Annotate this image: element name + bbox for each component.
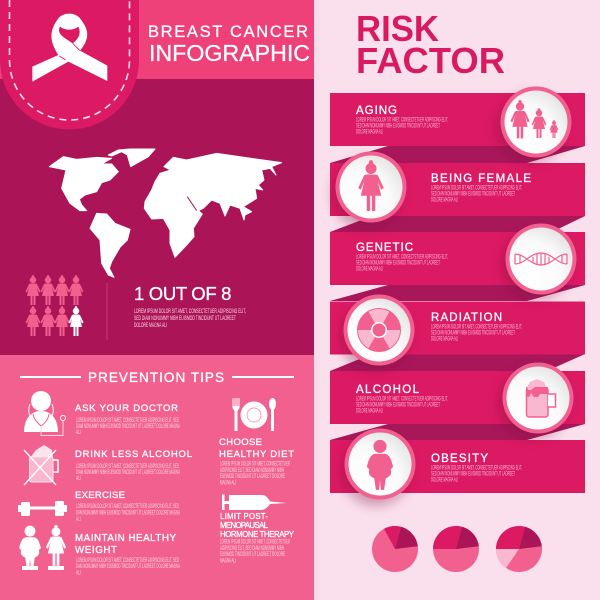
pie chart 2 (433, 526, 479, 572)
tip: maintain healthy weight: ALI (76, 570, 81, 576)
tip: drink less alcohol: ALI (76, 475, 81, 482)
tip: maintain healthy weight (75, 533, 180, 576)
tip: exercise (75, 490, 180, 523)
tip icon: doctor (24, 391, 66, 436)
tip: limit post-menopausal hormone therapy: HORMONE THERAPY (220, 530, 295, 539)
badge (0, 0, 139, 130)
risk: obesity: DOLORE MAGNA ALI (431, 476, 458, 484)
tip: limit post-menopausal hormone therapy: MENOPAUSAL (220, 521, 269, 530)
risk: being female (336, 152, 531, 222)
risk: genetic: DOLORE MAGNA ALI (356, 266, 383, 272)
tip: limit post-menopausal hormone therapy: MAGNA ALI (220, 558, 236, 564)
heading: prevention tips: PREVENTION TIPS (88, 370, 224, 385)
heading: risk factor: RISK (356, 8, 439, 49)
tip: drink less alcohol: DRINK LESS ALCOHOL (75, 449, 192, 460)
tip: limit post-menopausal hormone therapy: EUISMOD TINCIDUNT UT LAOREET DOLORE (220, 551, 285, 558)
text: LOREM IPSUM DOLOR SIT AMET, CONSECTETUER ADIPISCING ELIT, SED (76, 463, 179, 470)
risk: aging: AGING (356, 105, 397, 117)
tip: choose healthy diet (219, 437, 294, 486)
text: LOREM IPSUM DOLOR SIT AMET, CONSECTETUER ADIPISCING ELIT, SED (76, 503, 179, 510)
risk: obesity: OBESITY (431, 453, 488, 465)
risk: aging: LOREM IPSUM DOLOR SIT AMET, CONSECTETUER ADIPISCING ELIT, (356, 116, 448, 124)
tip: limit post-menopausal hormone therapy: LIMIT POST- (220, 512, 268, 521)
text: LOREM IPSUM DOLOR SIT AMET, CONSECTETUER ADIPISCING ELIT, SED (76, 557, 179, 564)
tip: choose healthy diet: HEALTHY DIET (219, 449, 294, 460)
tip: limit post-menopausal hormone therapy: ADIPISCING ELIT, SED DIAM NONUMMY NIBH (220, 545, 284, 552)
badge dashed stitching (10, 0, 130, 120)
strip between panels (314, 0, 320, 600)
statistic description: SED DIAM NONUMMY NIBH EUISMOD TINCIDUNT UT LAOREET (134, 315, 236, 322)
tip: ask your doctor: ALI (76, 429, 81, 436)
tip: ask your doctor (75, 403, 180, 436)
tip: choose healthy diet: ADIPISCING ELIT, SED DIAM NONUMMY NIBH (220, 467, 284, 474)
risk: radiation (344, 294, 522, 366)
tip: exercise: ALI (76, 516, 81, 523)
tip: choose healthy diet: MAGNA ALI (220, 480, 236, 486)
statistic description: DOLORE MAGNA ALI (134, 322, 167, 329)
tip icon: plate and cutlery (232, 398, 276, 431)
statistic description (134, 308, 246, 329)
panel: prevention tips (0, 355, 314, 600)
text: LOREM IPSUM DOLOR SIT AMET, CONSECTETUER ADIPISCING ELIT, SED (76, 417, 179, 424)
panel: title banner (0, 0, 314, 79)
risk: genetic: SED DIAM NONUMMY NIBH EUISMOD TINCIDUNT UT LAOREET (356, 260, 440, 266)
circle shadows (333, 94, 570, 505)
heading: risk factor: FACTOR (356, 40, 505, 81)
pie chart 1 (372, 526, 418, 572)
risk: aging: DOLORE MAGNA ALI (356, 128, 383, 136)
risk: being female: DOLORE MAGNA ALI (431, 196, 458, 204)
tip icon: dumbbell (18, 501, 67, 516)
statistic description: LOREM IPSUM DOLOR SIT AMET, CONSECTETUER ADIPISCING ELIT, (134, 308, 246, 315)
ribbon bands (330, 93, 585, 493)
world map (49, 149, 282, 277)
tip: exercise: EXERCISE (75, 490, 125, 501)
panel: world statistics (0, 79, 314, 355)
heading: breast cancer: BREAST CANCER (148, 23, 308, 41)
tip: drink less alcohol (75, 449, 192, 482)
risk: aging (356, 86, 572, 158)
risk: alcohol (356, 362, 574, 434)
tip icon: weight comparison (19, 525, 66, 570)
risk: radiation: DOLORE MAGNA ALI (431, 336, 458, 342)
risk: alcohol: ALCOHOL (356, 384, 420, 396)
heading: risk factor (356, 8, 505, 81)
icon: pink ribbon (32, 14, 107, 82)
heading: infographic: INFOGRAPHIC (149, 40, 310, 66)
text: LOREM IPSUM DOLOR SIT AMET, CONSECTETUER (220, 460, 290, 468)
risk: genetic: GENETIC (356, 242, 413, 254)
risk: alcohol: LOREM IPSUM DOLOR SIT AMET, CONSECTETUER ADIPISCING ELIT, (356, 396, 448, 402)
tip: choose healthy diet: EUISMOD TINCIDUNT UT LAOREET DOLORE (220, 473, 285, 480)
text: DIAM NONUMMY NIBH EUISMOD TINCIDUNT UT LAOREET DOLORE MAGNA (76, 469, 180, 476)
statistic: 1 out of 8: 1 OUT OF 8 (134, 283, 233, 304)
pictogram: 1 out of 8 women (26, 275, 84, 336)
risk: alcohol: SED DIAM NONUMMY NIBH EUISMOD TINCIDUNT UT LAOREET (356, 402, 440, 408)
text: DAM NONUMMY NIBH EUISMOD TINCIDUNT UT LAOREET DOLORE MAGNA (76, 563, 180, 570)
risk: radiation: RADIATION (431, 312, 502, 324)
tip: ask your doctor: ASK YOUR DOCTOR (75, 403, 178, 414)
text: LOREM IPSUM DOLOR SIT AMET, CONSECTETUER (220, 538, 290, 546)
tip: maintain healthy weight: MAINTAIN HEALTHY (75, 533, 176, 544)
risk: aging: SED DIAM NONUMMY NIBH EUISMOD TINCIDUNT UT LAOREET (356, 122, 440, 130)
text: DIAM NONUMMY NIBH EUISMOD TINCIDUNT UT LAOREET DOLORE MAGNA (76, 423, 180, 430)
risk: being female: BEING FEMALE (431, 173, 531, 185)
tip: limit post-menopausal hormone therapy (220, 512, 295, 564)
tip icon: syringe (222, 494, 287, 510)
risk: obesity (344, 428, 522, 500)
ribbon folds (330, 146, 585, 440)
tip: maintain healthy weight: WEIGHT (75, 545, 117, 556)
risk: alcohol: DOLORE MAGNA ALI (356, 408, 383, 414)
risk: genetic (356, 224, 576, 294)
risk: genetic: LOREM IPSUM DOLOR SIT AMET, CONSECTETUER ADIPISCING ELIT, (356, 254, 448, 260)
text: DAM NONUMMY NIBH EUISMOD TINCIDUNT UT LAOREET DOLORE MAGNA (76, 510, 180, 516)
tip: choose healthy diet: CHOOSE (219, 437, 262, 448)
pie chart 3 (496, 526, 542, 572)
tip icon: no alcohol (24, 445, 58, 485)
